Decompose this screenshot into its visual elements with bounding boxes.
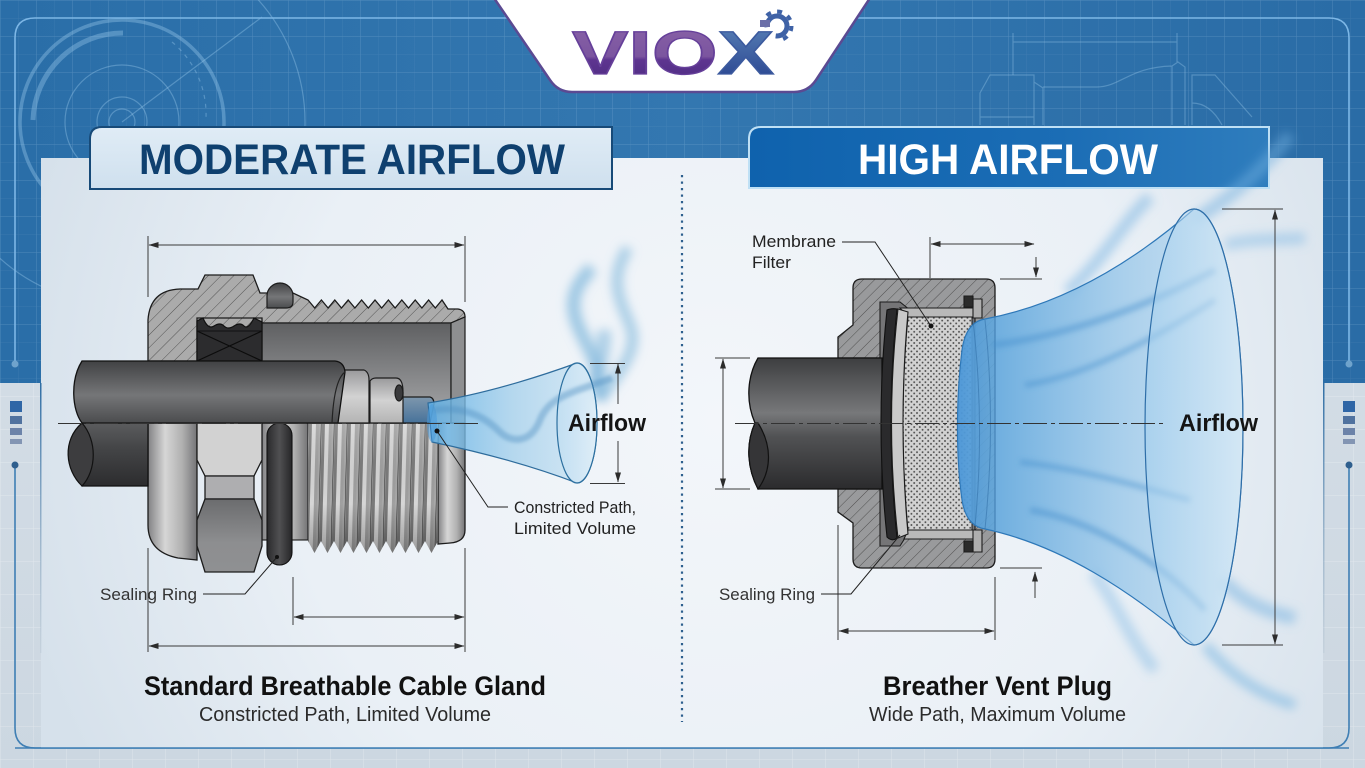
heading: high airflow bbox=[749, 127, 1269, 188]
centerline: cable gland bbox=[58, 422, 480, 424]
callout: sealing ring right: Sealing Ring bbox=[719, 586, 815, 604]
caption: breather vent plug: Wide Path, Maximum Volume bbox=[869, 704, 1126, 726]
diagram: standard breathable cable gland bbox=[68, 275, 465, 572]
silver retaining ring bbox=[892, 309, 908, 538]
airflow cone: standard gland bbox=[427, 248, 633, 483]
airflow cone: breather vent bbox=[957, 135, 1305, 705]
diagram: breather vent plug bbox=[749, 279, 995, 568]
metal ball bbox=[267, 283, 293, 308]
cable seal bbox=[197, 318, 262, 361]
cone streaks bbox=[993, 270, 1215, 610]
cable bbox=[749, 358, 882, 489]
sleeves bbox=[334, 370, 434, 423]
heading: moderate airflow bbox=[90, 127, 612, 189]
wisps behind cone bbox=[1067, 135, 1305, 705]
panel: main content background bbox=[15, 158, 1349, 748]
divider bbox=[681, 175, 683, 722]
callout: sealing ring left bbox=[100, 555, 279, 604]
blueprint decoration: concentric circles bbox=[0, 0, 305, 305]
filter cage top and bottom bbox=[900, 296, 982, 552]
end chamfer bbox=[451, 317, 465, 423]
caption: breather vent plug bbox=[869, 671, 1126, 726]
label: airflow left: Airflow bbox=[568, 410, 646, 437]
caption: standard breathable cable gland: Standard Breathable Cable Gland bbox=[144, 671, 546, 701]
callout: constricted path: Limited Volume bbox=[514, 520, 636, 538]
callout: constricted path bbox=[434, 428, 636, 538]
cone lip rings bbox=[973, 316, 995, 530]
dimension lines: cable gland bbox=[148, 236, 625, 652]
cable upper bbox=[74, 361, 345, 423]
gland threads bbox=[308, 424, 438, 553]
hex nut bbox=[197, 423, 262, 572]
callout: membrane filter: Filter bbox=[752, 254, 792, 272]
plug housing hatched bbox=[838, 279, 995, 568]
membrane filter bbox=[903, 317, 972, 530]
O-ring sealing ring lower bbox=[267, 423, 292, 565]
callout: membrane filter bbox=[752, 233, 934, 328]
left side markers bbox=[10, 360, 22, 468]
callout: constricted path: Constricted Path, bbox=[514, 499, 636, 517]
gland upper hatched body bbox=[148, 275, 465, 361]
callout: membrane filter: Membrane bbox=[752, 233, 836, 251]
dimension lines: breather vent bbox=[715, 209, 1283, 645]
interior bore bbox=[262, 323, 451, 423]
logo wordmark: VIO X bbox=[572, 19, 774, 87]
smoke plume bbox=[573, 248, 633, 400]
heading: moderate airflow: MODERATE AIRFLOW bbox=[139, 136, 565, 184]
blueprint decoration: technical drawing bbox=[980, 33, 1252, 125]
caption: breather vent plug: Breather Vent Plug bbox=[883, 671, 1112, 701]
gland lower body: collar bbox=[262, 423, 308, 540]
callout: sealing ring right bbox=[719, 535, 900, 604]
sealing ring black crescent bbox=[881, 309, 897, 540]
gland lower body: rounded nut bbox=[148, 423, 197, 560]
icon: gear bbox=[760, 12, 792, 40]
label: airflow right: Airflow bbox=[1179, 410, 1258, 437]
smoke inside cone bbox=[434, 378, 612, 439]
heading: high airflow: HIGH AIRFLOW bbox=[858, 136, 1158, 184]
inner cavity dark bbox=[880, 302, 975, 546]
cable lower bbox=[72, 423, 148, 486]
logo: VIOX badge bbox=[494, 0, 870, 92]
caption: standard breathable cable gland: Constricted Path, Limited Volume bbox=[199, 704, 491, 726]
centerline: breather vent bbox=[735, 422, 1165, 424]
right side markers bbox=[1343, 360, 1355, 468]
caption: standard breathable cable gland bbox=[144, 671, 546, 726]
gland lower body: end bbox=[438, 423, 465, 544]
callout: sealing ring left: Sealing Ring bbox=[100, 586, 197, 604]
